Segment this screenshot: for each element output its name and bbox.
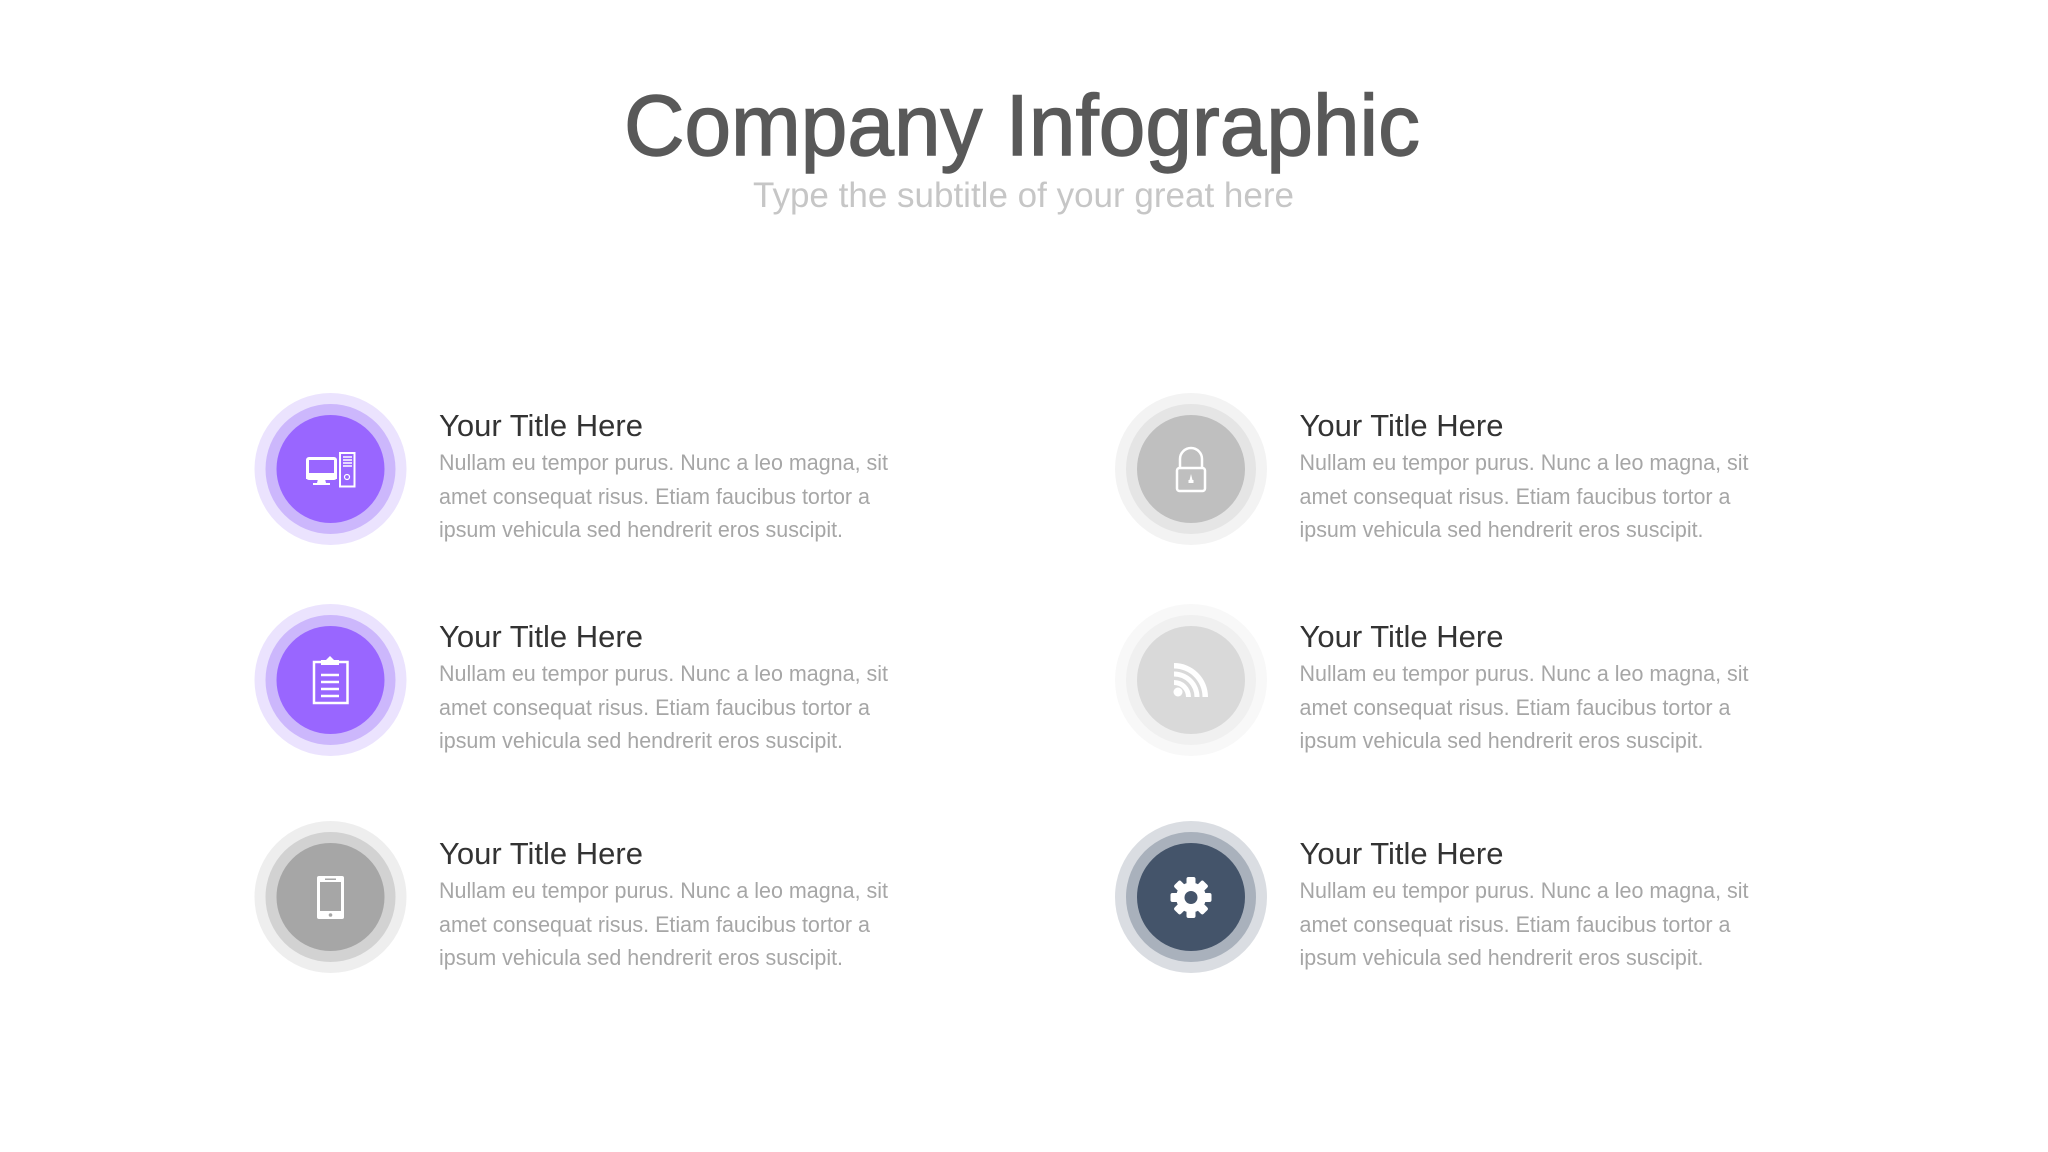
item description: Nullam eu tempor purus. Nunc a leo magna, sit xyxy=(1300,661,1749,686)
item: gear (right column, row 3) xyxy=(1115,821,1749,973)
item description xyxy=(1300,878,1749,970)
item description xyxy=(1300,450,1749,542)
item heading: Your Title Here xyxy=(1300,619,1504,654)
icon: lock badge xyxy=(1115,393,1267,545)
item: rss (right column, row 2) xyxy=(1115,604,1749,756)
icon: phone badge xyxy=(254,821,406,973)
item description xyxy=(439,450,889,542)
item: computer (left column, row 1) xyxy=(254,393,889,545)
icon: computer badge xyxy=(254,393,406,545)
item: phone (left column, row 3) xyxy=(254,821,889,973)
item description: amet consequat risus. Etiam faucibus tortor a xyxy=(1300,912,1731,937)
item description: Nullam eu tempor purus. Nunc a leo magna, sit xyxy=(439,661,889,686)
item heading: Your Title Here xyxy=(1300,836,1504,871)
item description: amet consequat risus. Etiam faucibus tortor a xyxy=(1300,695,1731,720)
item heading: Your Title Here xyxy=(439,836,643,871)
item heading: Your Title Here xyxy=(1300,408,1504,443)
subtitle: Type the subtitle of your great here xyxy=(753,176,1294,215)
item description xyxy=(439,878,889,970)
item description: amet consequat risus. Etiam faucibus tortor a xyxy=(439,912,870,937)
item: lock (right column, row 1) xyxy=(1115,393,1749,545)
item heading: Your Title Here xyxy=(439,619,643,654)
icon: rss badge xyxy=(1115,604,1267,756)
item: clipboard (left column, row 2) xyxy=(254,604,889,756)
item description: ipsum vehicula sed hendrerit eros suscipit. xyxy=(1300,728,1704,753)
item description xyxy=(439,661,889,753)
item description: Nullam eu tempor purus. Nunc a leo magna, sit xyxy=(1300,878,1749,903)
title: Company Infographic xyxy=(624,78,1420,174)
item description: ipsum vehicula sed hendrerit eros suscipit. xyxy=(439,945,843,970)
item description xyxy=(1300,661,1749,753)
item description: Nullam eu tempor purus. Nunc a leo magna, sit xyxy=(439,878,889,903)
item description: ipsum vehicula sed hendrerit eros suscipit. xyxy=(439,728,843,753)
item description: Nullam eu tempor purus. Nunc a leo magna, sit xyxy=(1300,450,1749,475)
item description: ipsum vehicula sed hendrerit eros suscipit. xyxy=(1300,517,1704,542)
item description: amet consequat risus. Etiam faucibus tortor a xyxy=(439,695,870,720)
item description: ipsum vehicula sed hendrerit eros suscipit. xyxy=(1300,945,1704,970)
item description: amet consequat risus. Etiam faucibus tortor a xyxy=(1300,484,1731,509)
item heading: Your Title Here xyxy=(439,408,643,443)
item description: Nullam eu tempor purus. Nunc a leo magna, sit xyxy=(439,450,889,475)
icon: gear badge xyxy=(1115,821,1267,973)
icon: clipboard badge xyxy=(254,604,406,756)
item description: amet consequat risus. Etiam faucibus tortor a xyxy=(439,484,870,509)
item description: ipsum vehicula sed hendrerit eros suscipit. xyxy=(439,517,843,542)
